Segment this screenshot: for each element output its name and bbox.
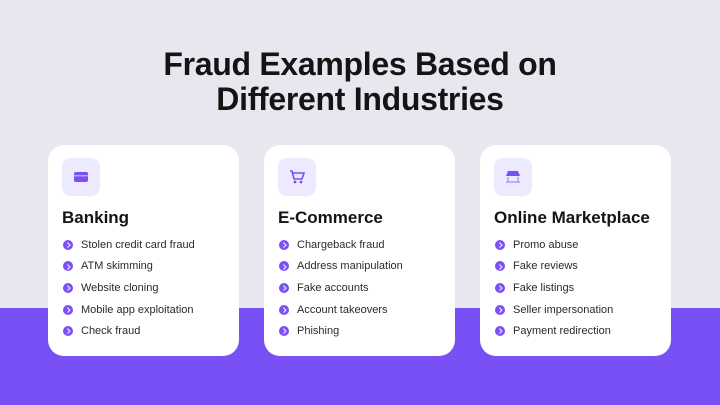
icon: store	[494, 158, 532, 196]
panel: e-commerce	[264, 145, 455, 356]
list	[495, 239, 613, 337]
title: Different Industries	[216, 81, 504, 117]
list: Payment redirection	[513, 325, 611, 337]
icon: cart	[278, 158, 316, 196]
list: Address manipulation	[297, 260, 403, 272]
list	[63, 239, 195, 337]
list	[279, 239, 403, 337]
title: Fraud Examples Based on	[163, 46, 557, 82]
heading: E-Commerce	[278, 208, 383, 227]
panel: online marketplace	[480, 145, 671, 356]
list: Account takeovers	[297, 304, 388, 316]
list: Phishing	[297, 325, 339, 337]
list: Check fraud	[81, 325, 140, 337]
list: ATM skimming	[81, 260, 153, 272]
list: Fake reviews	[513, 260, 578, 272]
heading: Banking	[62, 208, 129, 227]
list: Chargeback fraud	[297, 239, 384, 251]
title	[163, 46, 557, 117]
list: Seller impersonation	[513, 304, 613, 316]
panel: banking	[48, 145, 239, 356]
list: Fake listings	[513, 282, 574, 294]
icon: credit card	[62, 158, 100, 196]
list: Fake accounts	[297, 282, 369, 294]
list: Website cloning	[81, 282, 158, 294]
list: Stolen credit card fraud	[81, 239, 195, 251]
heading: Online Marketplace	[494, 208, 650, 227]
list: Promo abuse	[513, 239, 578, 251]
list: Mobile app exploitation	[81, 304, 194, 316]
